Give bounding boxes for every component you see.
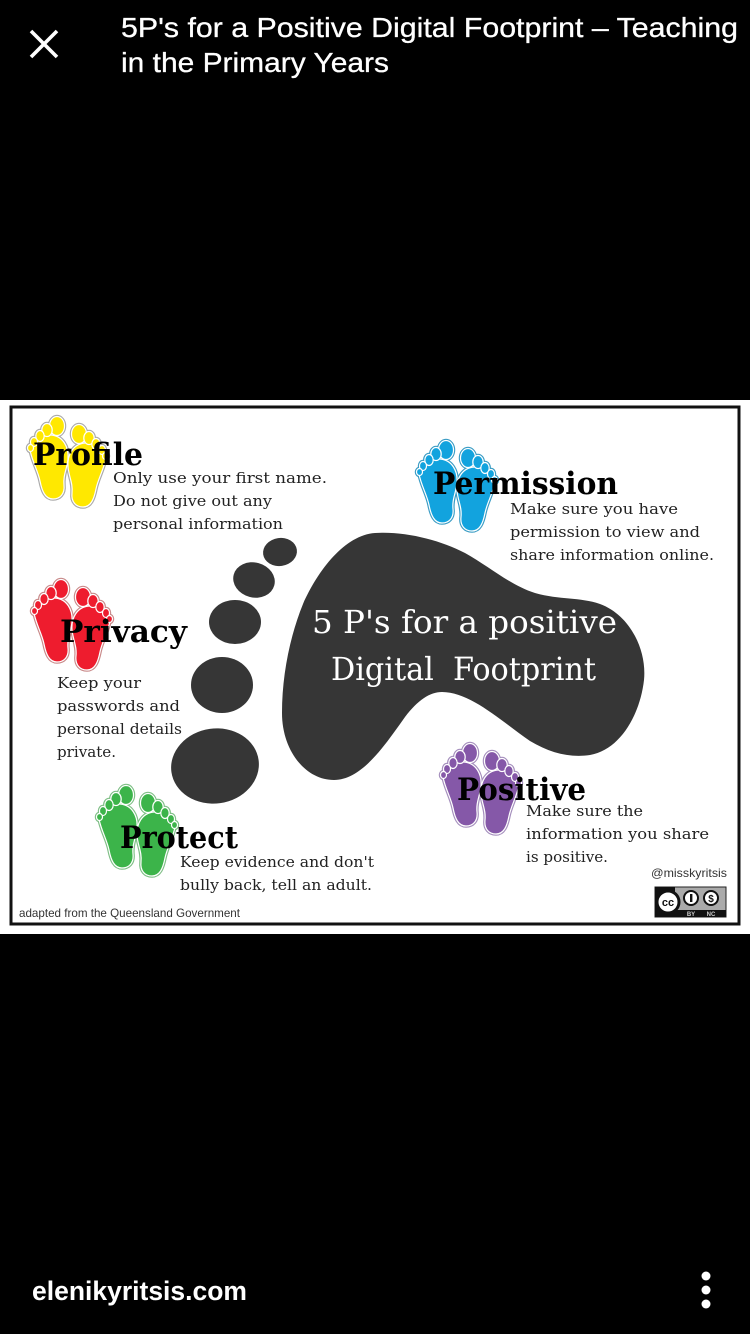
footprint title (312, 603, 617, 688)
section: Positive: Make sure the (526, 802, 643, 820)
page title (121, 12, 738, 78)
section: Profile: personal information (113, 515, 283, 533)
icon: more menu (702, 1272, 710, 1308)
section: Permission: share information online. (510, 546, 714, 564)
icon: blue feet (416, 440, 498, 531)
page title: 5P's for a Positive Digital Footprint – Teaching (121, 12, 738, 43)
section: Positive: Positive (457, 772, 586, 808)
section: Permission: permission to view and (510, 523, 700, 541)
section: Protect: bully back, tell an adult. (180, 876, 372, 894)
section: Profile: Do not give out any (113, 492, 273, 510)
section: Permission (433, 466, 714, 564)
icon: creative commons badge: NC (707, 912, 716, 918)
section: Positive: information you share (526, 825, 709, 843)
attribution: adapted from the Queensland Government (19, 906, 241, 920)
section: Profile (33, 437, 327, 533)
section: Protect: Keep evidence and don't (180, 853, 374, 871)
icon: creative commons badge (655, 887, 726, 918)
section: Profile: Profile (33, 437, 143, 473)
section: Protect (120, 820, 374, 894)
footprint title: 5 P's for a positive (312, 603, 617, 641)
icon: red feet (32, 580, 112, 670)
section: Protect: Protect (120, 820, 239, 856)
section: Privacy: Privacy (60, 614, 188, 650)
footprint title: Digital Footprint (331, 650, 596, 688)
icon: green feet (96, 786, 178, 876)
section: Privacy: Keep your (57, 674, 142, 692)
section: Profile: Only use your first name. (113, 469, 327, 487)
icon: close (31, 31, 57, 57)
icon: purple feet (440, 744, 522, 834)
icon: creative commons badge: BY (687, 912, 695, 918)
icon: creative commons badge: $ (708, 894, 714, 905)
section: Privacy: private. (57, 743, 116, 761)
section: Privacy: personal details (57, 720, 182, 738)
icon: creative commons badge: cc (662, 897, 674, 909)
panel: infographic (0, 400, 750, 934)
section: Privacy: passwords and (57, 697, 180, 715)
source domain: elenikyritsis.com (32, 1276, 247, 1306)
icon: yellow feet (28, 416, 108, 507)
handle: @misskyritsis (651, 866, 727, 880)
page title: in the Primary Years (121, 47, 389, 78)
section: Positive (457, 772, 709, 866)
section: Positive: is positive. (526, 848, 608, 866)
section: Permission: Permission (433, 466, 618, 502)
section: Privacy (57, 614, 188, 761)
big footprint (166, 533, 644, 809)
section: Permission: Make sure you have (510, 500, 678, 518)
